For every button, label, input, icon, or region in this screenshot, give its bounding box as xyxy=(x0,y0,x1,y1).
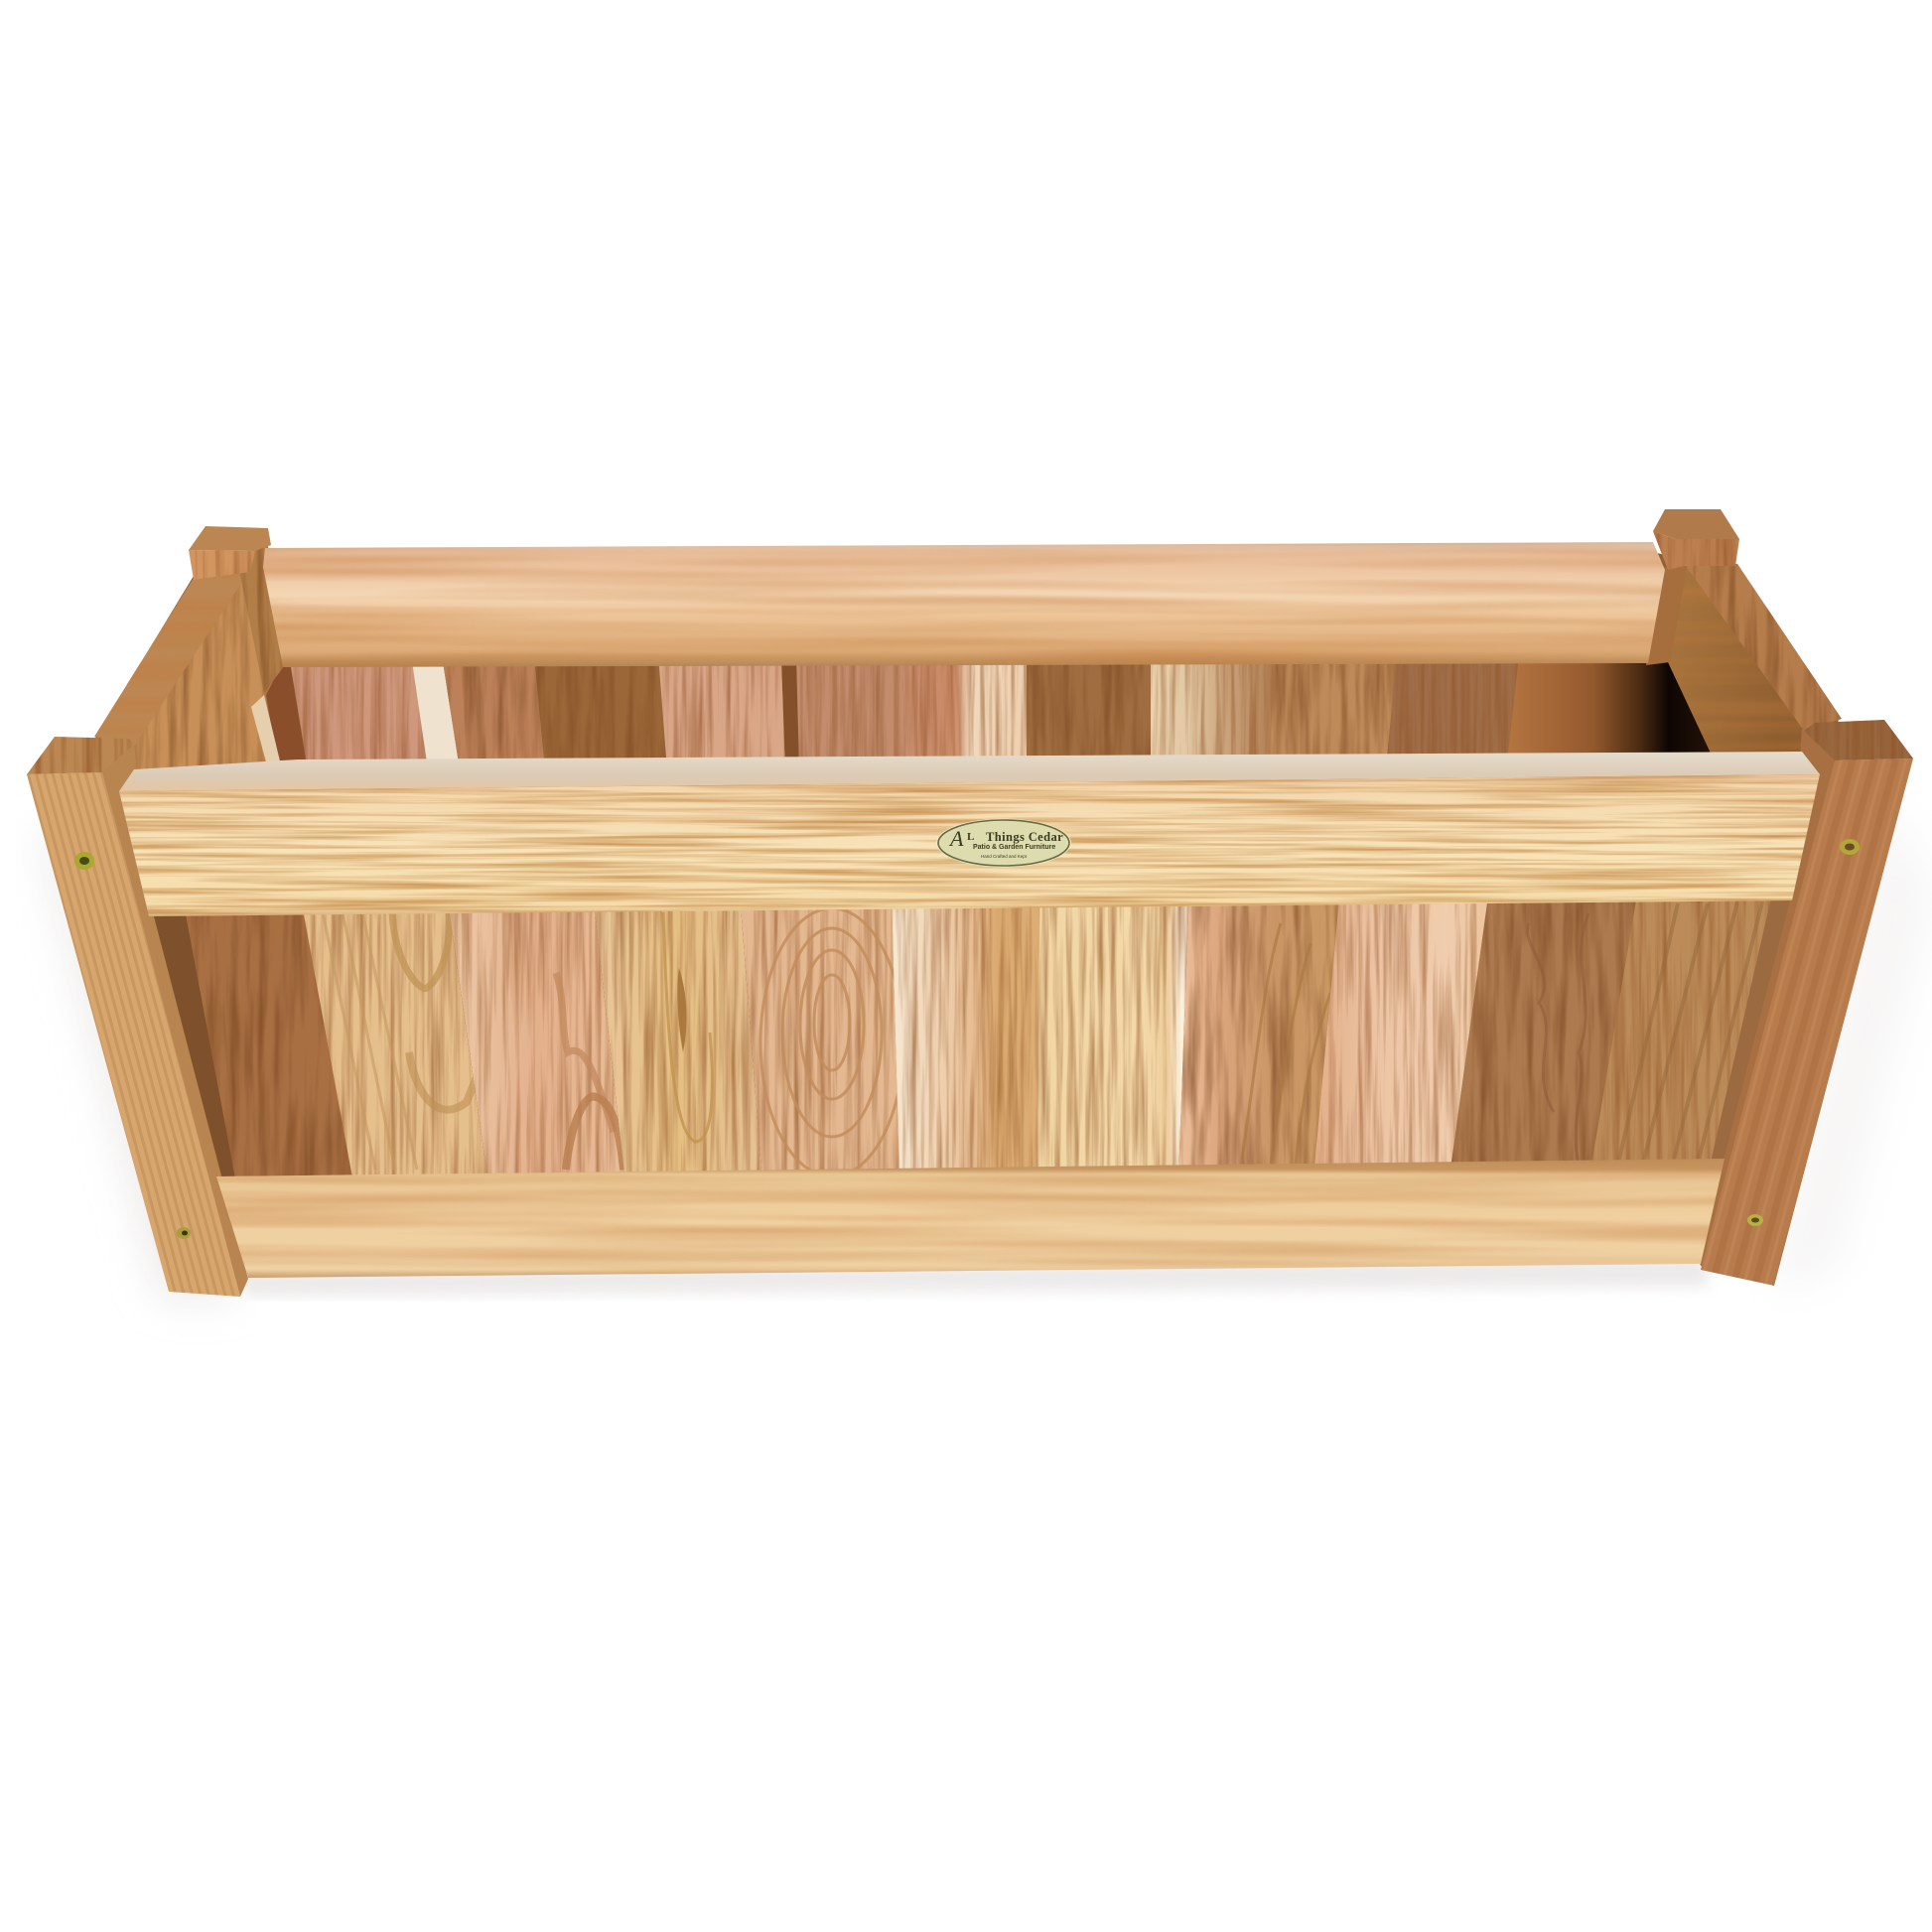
product photo: cedar planter box xyxy=(27,509,1913,1305)
right front post side xyxy=(1698,729,1837,1270)
front panel boards xyxy=(149,889,1802,1183)
brand badge: All Things Cedar: Hand Crafted and Kept xyxy=(981,854,1028,859)
front panel backing xyxy=(149,889,1799,1186)
rear right post cap xyxy=(1653,509,1739,570)
board 11 ribbed brown xyxy=(1592,900,1771,1160)
left front post side xyxy=(99,745,248,1297)
right inner side panel xyxy=(1646,562,1842,759)
board 1 dark cedar xyxy=(182,894,353,1183)
interior back panel boards xyxy=(256,655,1723,769)
brand badge: All Things Cedar: Patio & Garden Furniture xyxy=(973,844,1055,851)
board 7 pale yellow xyxy=(1037,889,1189,1181)
board 5 knot grain xyxy=(741,909,899,1170)
bottom front rail xyxy=(216,1159,1725,1278)
board 9 pale pink xyxy=(1313,889,1489,1176)
brand badge: All Things Cedar: Things Cedar xyxy=(986,830,1063,844)
board 4 yellow cedar xyxy=(595,910,761,1172)
screw lower right xyxy=(1747,1214,1763,1226)
board 6 cream to tan xyxy=(892,894,1039,1183)
brand badge: All Things Cedar xyxy=(936,818,1071,868)
board 8 pink to brown xyxy=(1179,905,1338,1166)
board 10 brown xyxy=(1451,901,1636,1162)
brand badge: All Things Cedar: A xyxy=(948,826,964,851)
rear left post cap xyxy=(189,526,271,580)
brand badge: All Things Cedar: L xyxy=(967,831,974,843)
board 3 pink cedar xyxy=(450,911,623,1173)
right front post xyxy=(1701,720,1913,1286)
recess right of front boards xyxy=(1710,894,1802,1167)
screw lower left xyxy=(177,1227,191,1239)
interior backing behind side panels and boards xyxy=(94,552,1839,794)
board 2 tan with cathedral grain xyxy=(304,913,486,1175)
top front rail xyxy=(119,752,1820,916)
recess left of front boards xyxy=(149,908,238,1181)
screw upper right xyxy=(1840,839,1860,855)
left inner side panel xyxy=(94,546,285,769)
left front post xyxy=(27,737,240,1297)
screw upper left xyxy=(74,852,94,870)
soft ground shadows xyxy=(35,794,1932,1301)
rear rail xyxy=(263,542,1665,667)
